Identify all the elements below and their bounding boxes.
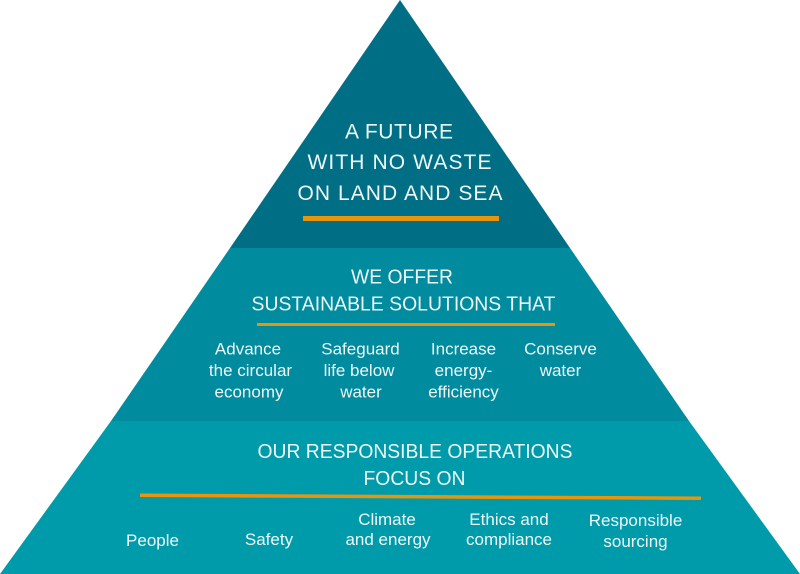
item: safeguard life below water: water xyxy=(339,382,382,402)
item: advance the circular economy: Advance xyxy=(215,340,281,358)
tier: top, vision xyxy=(230,0,570,248)
item: safeguard life below water: Safeguard xyxy=(321,340,400,358)
item: increase energy-efficiency: efficiency xyxy=(428,382,499,402)
item: increase energy-efficiency: Increase xyxy=(431,340,496,358)
bottom tier heading: FOCUS ON xyxy=(364,467,466,490)
top tier orange rule xyxy=(303,216,499,221)
item: increase energy-efficiency xyxy=(428,340,499,402)
item: safety: Safety xyxy=(245,530,294,549)
bottom tier background xyxy=(0,421,800,574)
item: safeguard life below water: life below xyxy=(324,361,395,380)
item: responsible sourcing: sourcing xyxy=(603,532,668,551)
middle tier orange rule xyxy=(257,323,555,326)
item: responsible sourcing xyxy=(589,511,682,551)
top tier heading: WITH NO WASTE xyxy=(308,151,492,174)
item: people: People xyxy=(126,531,179,550)
item: increase energy-efficiency: energy- xyxy=(435,361,492,380)
item: ethics and compliance xyxy=(466,510,552,549)
middle tier heading xyxy=(252,266,556,316)
item: ethics and compliance: compliance xyxy=(466,530,552,549)
item: conserve water xyxy=(524,340,597,380)
item: ethics and compliance: Ethics and xyxy=(469,510,549,529)
item: conserve water: Conserve xyxy=(524,340,597,358)
item: advance the circular economy: the circular xyxy=(209,361,292,380)
item: climate and energy: Climate xyxy=(358,510,416,529)
middle tier heading: WE OFFER xyxy=(351,266,453,288)
middle tier background xyxy=(111,248,689,421)
top tier heading: A FUTURE xyxy=(345,120,453,144)
item: advance the circular economy xyxy=(209,340,292,402)
item: climate and energy: and energy xyxy=(345,530,431,549)
middle tier heading: SUSTAINABLE SOLUTIONS THAT xyxy=(252,292,556,316)
top tier background xyxy=(230,0,570,248)
bottom tier orange rule xyxy=(140,494,701,500)
item: conserve water: water xyxy=(539,361,582,380)
item: advance the circular economy: economy xyxy=(215,382,284,402)
item: climate and energy xyxy=(345,510,431,549)
tier: bottom, responsible operations xyxy=(0,421,800,574)
top tier heading: ON LAND AND SEA xyxy=(298,182,502,205)
bottom tier heading: OUR RESPONSIBLE OPERATIONS xyxy=(258,440,572,463)
top tier heading xyxy=(298,120,502,205)
item: safeguard life below water xyxy=(321,340,400,402)
tier: middle, sustainable solutions xyxy=(111,248,689,421)
item: responsible sourcing: Responsible xyxy=(589,511,682,530)
bottom tier heading xyxy=(258,440,572,490)
